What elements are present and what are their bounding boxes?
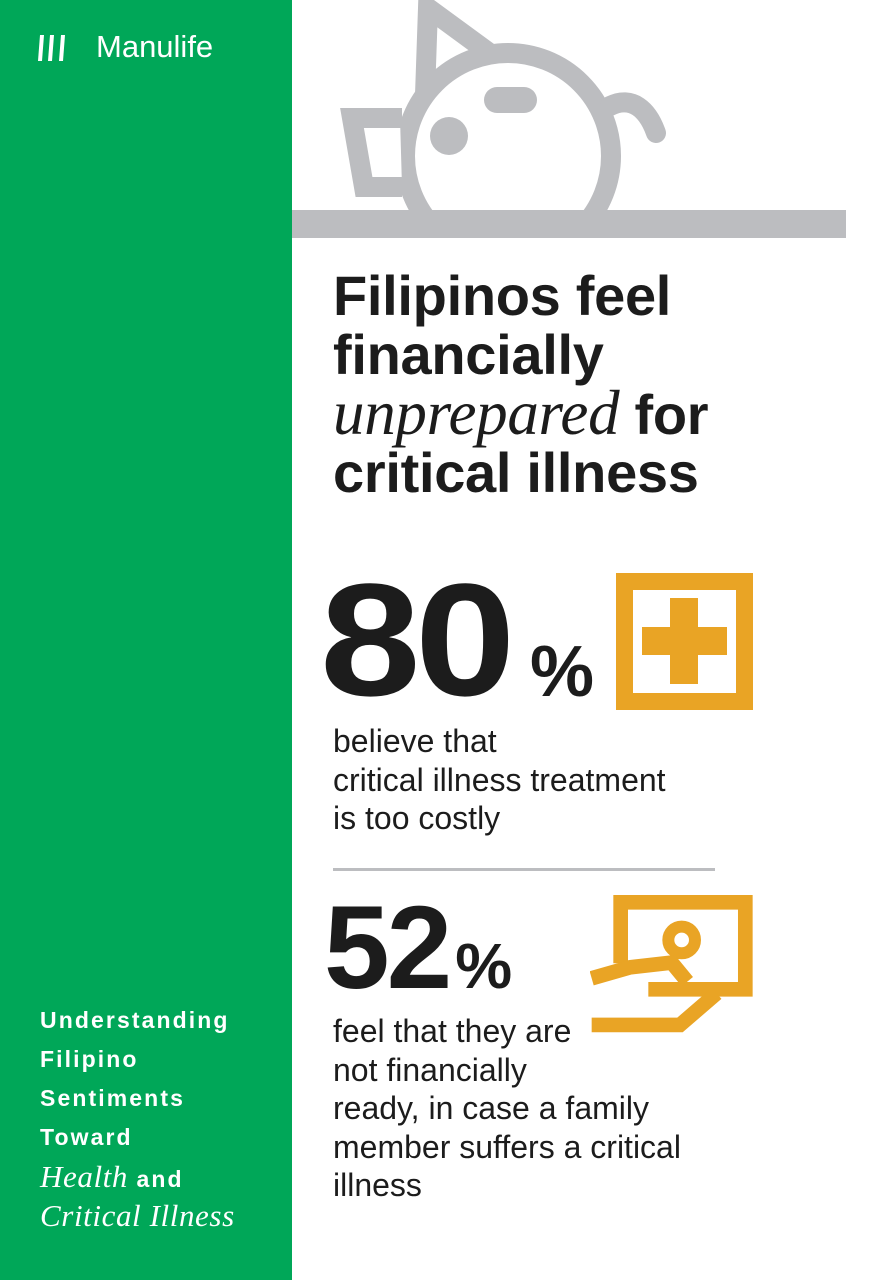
text: 52% description: member suffers a critical: [333, 1128, 681, 1164]
side title: Filipino: [40, 1046, 139, 1072]
headline: [333, 264, 708, 504]
side title: Critical Illness: [40, 1198, 235, 1233]
text: 80% description: is too costly: [333, 800, 500, 836]
headline: critical illness: [333, 441, 699, 504]
text: 80% description: believe that: [333, 723, 497, 759]
stat 80%: 80: [320, 550, 510, 729]
stat 80%: [320, 550, 594, 729]
text: 80% description: [333, 723, 666, 836]
icon: piggy bank: [292, 0, 846, 238]
text: 52% description: feel that they are: [333, 1013, 571, 1049]
left green panel: [0, 0, 292, 1280]
logo: Manulife: [96, 29, 213, 64]
side title: [40, 1007, 235, 1233]
headline: unprepared for: [333, 378, 708, 448]
icon: medical cross: [616, 573, 753, 710]
icon: hand holding money: [590, 895, 753, 1032]
side title: Sentiments: [40, 1085, 185, 1111]
side title: Toward: [40, 1124, 133, 1150]
text: 52% description: not financially: [333, 1052, 527, 1088]
logo: [38, 29, 213, 64]
headline: Filipinos feel: [333, 264, 671, 327]
text: 52% description: ready, in case a family: [333, 1090, 649, 1126]
text: 52% description: [333, 1013, 681, 1203]
side title: Health and: [40, 1159, 184, 1194]
side title: Understanding: [40, 1007, 230, 1033]
stat 80%: %: [530, 632, 594, 712]
stat 52%: 52%: [324, 882, 512, 1014]
text: 80% description: critical illness treatment: [333, 762, 666, 798]
headline: financially: [333, 323, 604, 386]
text: 52% description: illness: [333, 1167, 422, 1203]
